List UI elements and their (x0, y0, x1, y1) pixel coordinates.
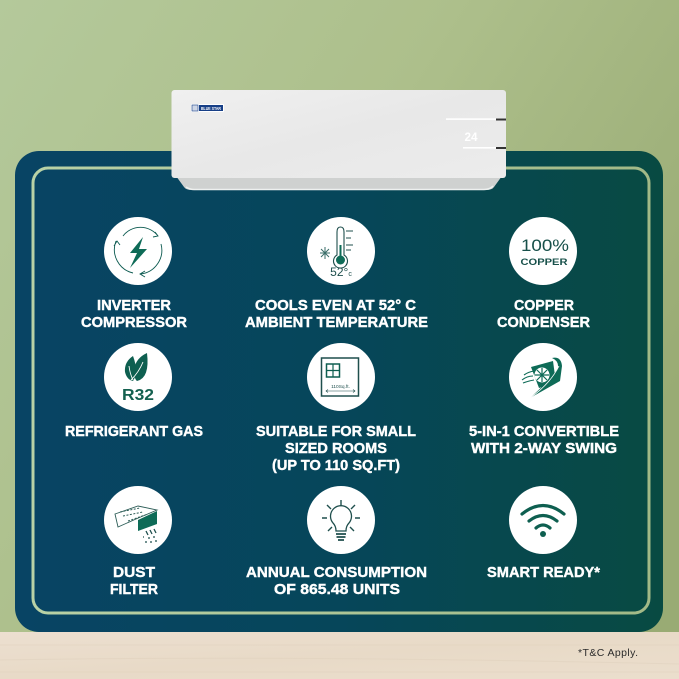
temperature display: 24 (464, 130, 478, 144)
label: AMBIENT TEMPERATURE (245, 315, 428, 331)
label: 5-IN-1 CONVERTIBLE (469, 424, 619, 440)
icon: room floor plan: 110Sq.ft. (331, 384, 350, 390)
footnote: *T&C Apply. (578, 647, 638, 659)
label: REFRIGERANT GAS (65, 424, 203, 440)
icon: thermometer with snowflake (307, 217, 375, 285)
label: DUST (113, 565, 155, 581)
feature: annual consumption (246, 486, 427, 598)
label: ANNUAL CONSUMPTION (246, 565, 427, 581)
label: SUITABLE FOR SMALL (256, 424, 416, 440)
feature: smart ready (487, 486, 600, 581)
label: CONDENSER (497, 315, 591, 331)
label: OF 865.48 UNITS (274, 582, 400, 598)
icon: thermometer with snowflake: 52°c (330, 265, 352, 279)
feature: refrigerant gas (65, 343, 203, 440)
panel: features background (15, 151, 663, 632)
display light strips (446, 118, 506, 149)
icon: room floor plan (307, 343, 375, 411)
air conditioner unit (172, 90, 506, 190)
icon: light bulb (307, 486, 375, 554)
feature: cools even at 52 C (245, 217, 428, 331)
feature: dust filter (104, 486, 172, 598)
feature: 5-in-1 convertible (469, 343, 619, 457)
icon: R32 leaves: R32 (122, 387, 154, 404)
feature: copper condenser (497, 217, 591, 331)
label: FILTER (110, 582, 159, 598)
brand logo (191, 104, 224, 112)
label (469, 424, 619, 457)
icon: 100% copper (509, 217, 577, 285)
label: (UP TO 110 SQ.FT) (272, 458, 400, 474)
icon: fan with swing (509, 343, 577, 411)
label: SIZED ROOMS (285, 441, 387, 457)
panel inner border (33, 168, 649, 613)
label: INVERTER (97, 298, 172, 314)
label (81, 298, 188, 331)
label (256, 424, 416, 474)
feature: inverter compressor (81, 217, 188, 331)
icon: inverter cycle with bolt (104, 217, 172, 285)
label: COMPRESSOR (81, 315, 188, 331)
label (110, 565, 159, 598)
label: WITH 2-WAY SWING (471, 441, 617, 457)
label (246, 565, 427, 598)
label (497, 298, 591, 331)
feature: small rooms (256, 343, 416, 474)
wooden floor (0, 632, 679, 679)
icon: wifi (509, 486, 577, 554)
icon: 100% copper: 100% (521, 237, 569, 255)
label (245, 298, 428, 331)
icon: 100% copper: COPPER (520, 257, 568, 267)
label: COPPER (514, 298, 575, 314)
label: SMART READY* (487, 565, 600, 581)
brand logo: BLUE STAR (201, 106, 222, 111)
icon: filter with dust (104, 486, 172, 554)
label: COOLS EVEN AT 52° C (255, 298, 417, 314)
